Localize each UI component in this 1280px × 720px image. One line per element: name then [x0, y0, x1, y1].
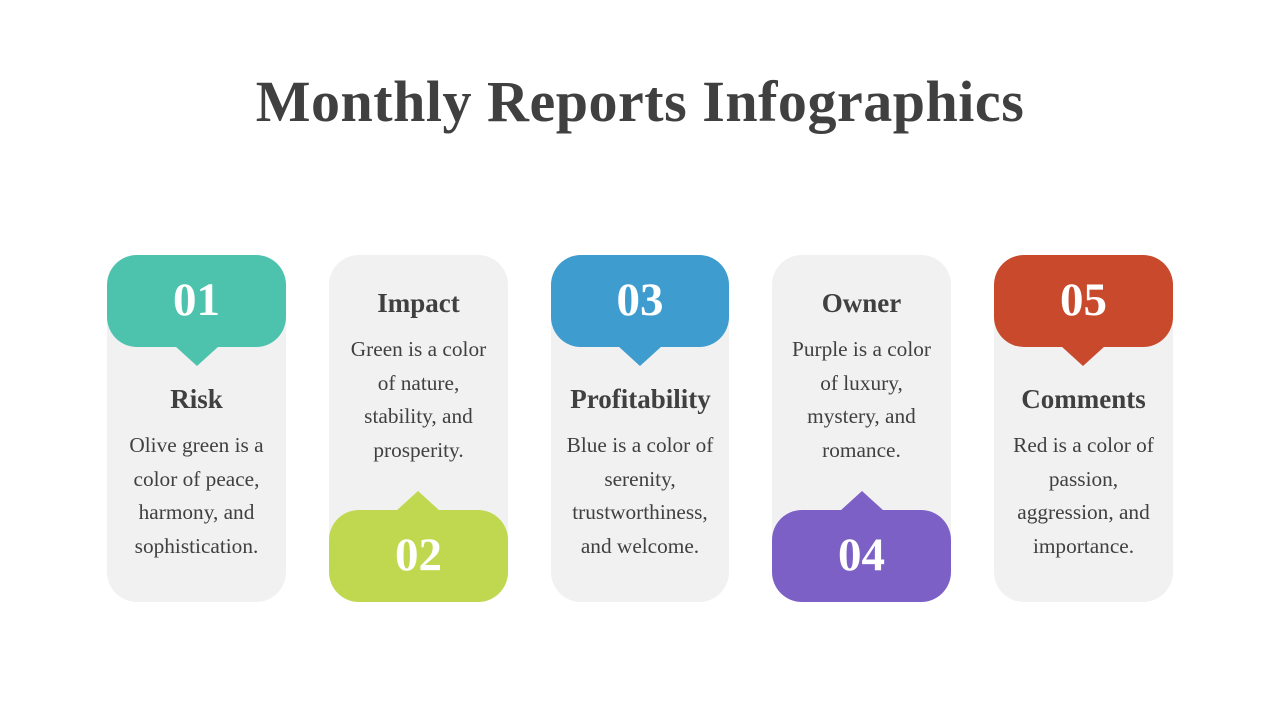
icon: pointer 05 — [1062, 347, 1104, 366]
icon: pointer 03 — [619, 347, 661, 366]
icon: pointer 01 — [176, 347, 218, 366]
badge: 03 — [551, 255, 729, 347]
text: comments — [1013, 433, 1154, 558]
badge: 04 — [772, 510, 951, 602]
heading: owner: Owner — [822, 288, 901, 318]
text: profitability: and welcome. — [581, 534, 699, 558]
badge: 05: 05 — [1060, 274, 1107, 326]
panel: impact — [329, 255, 508, 602]
badge: 02: 02 — [395, 529, 442, 581]
text: owner: romance. — [822, 438, 901, 462]
text: comments: aggression, and — [1017, 500, 1150, 524]
panel: profitability — [551, 255, 729, 602]
title: Monthly Reports Infographics — [256, 69, 1024, 134]
text: impact — [351, 337, 486, 462]
text: risk: Olive green is a — [129, 433, 264, 457]
text: profitability: serenity, — [604, 467, 676, 491]
text: owner: mystery, and — [807, 404, 916, 428]
panel: owner — [772, 255, 951, 602]
badge: 04: 04 — [838, 529, 885, 581]
heading: risk: Risk — [170, 384, 223, 414]
text: owner — [792, 337, 931, 462]
text: profitability: Blue is a color of — [567, 433, 713, 457]
heading: impact: Impact — [377, 288, 460, 318]
badge: 01: 01 — [173, 274, 220, 326]
text: impact: of nature, — [378, 371, 459, 395]
badge: 01 — [107, 255, 286, 347]
icon: pointer 04 — [841, 491, 883, 510]
badge: 03: 03 — [616, 274, 664, 326]
text: impact: Green is a color — [351, 337, 486, 361]
text: profitability — [567, 433, 714, 558]
text: risk: sophistication. — [135, 534, 258, 558]
text: owner: Purple is a color — [792, 337, 931, 361]
icon: pointer 02 — [397, 491, 439, 510]
text: impact: prosperity. — [373, 438, 464, 462]
text: comments: passion, — [1049, 467, 1118, 491]
badge: 02 — [329, 510, 508, 602]
badge: 05 — [994, 255, 1173, 347]
text: risk — [129, 433, 264, 558]
text: owner: of luxury, — [820, 371, 903, 395]
panel: risk — [107, 255, 286, 602]
heading: profitability: Profitability — [570, 384, 711, 414]
text: profitability: trustworthiness, — [572, 500, 708, 524]
heading: comments: Comments — [1021, 384, 1146, 414]
text: risk: color of peace, — [134, 467, 259, 491]
text: risk: harmony, and — [139, 500, 254, 524]
text: comments: Red is a color of — [1013, 433, 1154, 457]
text: impact: stability, and — [364, 404, 473, 428]
text: comments: importance. — [1033, 534, 1134, 558]
panel: comments — [994, 255, 1173, 602]
